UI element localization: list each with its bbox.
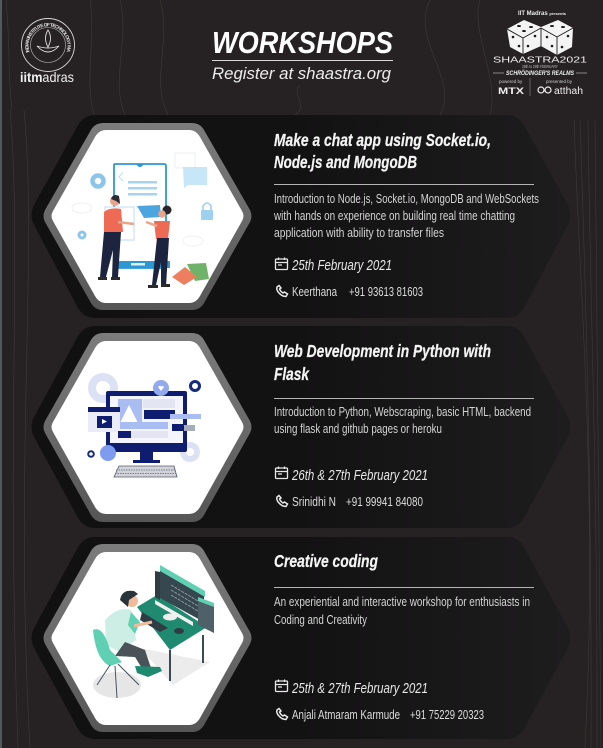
workshop title bbox=[274, 130, 491, 172]
panel background bbox=[32, 326, 570, 528]
panel background bbox=[32, 115, 570, 318]
logo: IIT Madras: iitmadras bbox=[20, 69, 74, 85]
date: 26th & 27th February 2021 bbox=[291, 467, 428, 484]
logo: Shaastra 2021: presented by bbox=[546, 79, 573, 84]
logo: Shaastra 2021: MTX bbox=[498, 86, 524, 96]
contact bbox=[292, 284, 423, 299]
hexagon frame bbox=[44, 544, 252, 732]
icon: calendar bbox=[276, 466, 288, 478]
date: 25th & 27th February 2021 bbox=[291, 680, 428, 697]
contact: Srinidhi N bbox=[292, 494, 336, 509]
icon: calendar bbox=[276, 680, 288, 692]
description: application with ability to transfer files bbox=[274, 226, 444, 240]
logo: Shaastra 2021: 25th to 28th FEBRUARY bbox=[522, 64, 558, 69]
contact: Anjali Atmaram Karmude bbox=[292, 707, 400, 722]
logo: Shaastra 2021: SCHRÖDINGER'S REALMS bbox=[506, 68, 575, 77]
icon: dice bbox=[507, 20, 573, 55]
contact: +91 93613 81603 bbox=[349, 284, 423, 299]
description: with hands on experience on building real time chatting bbox=[273, 209, 515, 223]
hexagon picture background bbox=[52, 130, 244, 303]
description bbox=[274, 595, 530, 627]
contact: +91 99941 84080 bbox=[346, 494, 423, 509]
illustration: person coding at desk bbox=[93, 565, 214, 698]
panel: web development workshop bbox=[32, 326, 570, 528]
logo: Shaastra 2021: IIT Madras presents bbox=[518, 11, 567, 17]
hexagon frame bbox=[44, 123, 252, 310]
hexagon picture background bbox=[52, 341, 244, 514]
description bbox=[273, 192, 539, 240]
illustration: people with phone screen bbox=[72, 153, 213, 288]
description: Coding and Creativity bbox=[274, 613, 368, 627]
workshop title bbox=[274, 341, 491, 384]
logo: IIT Madras bbox=[20, 18, 75, 85]
panel: chat app workshop bbox=[32, 115, 570, 318]
hexagon frame bbox=[44, 333, 252, 522]
workshop title: Make a chat app using Socket.io, bbox=[274, 130, 491, 150]
description: An experiential and interactive workshop for enthusiasts in bbox=[274, 595, 530, 609]
panel background bbox=[32, 537, 570, 739]
contact: +91 75229 20323 bbox=[410, 707, 484, 722]
date: 25th February 2021 bbox=[291, 257, 392, 274]
icon: phone bbox=[277, 496, 288, 506]
contact: Keerthana bbox=[292, 284, 338, 299]
logo: Shaastra 2021: atthah bbox=[554, 86, 583, 97]
workshop title: Node.js and MongoDB bbox=[274, 152, 417, 172]
subheading: register: Register at shaastra.org bbox=[212, 64, 392, 83]
description: using flask and github pages or heroku bbox=[274, 422, 442, 436]
logo: Shaastra 2021: SHAASTRA2021 bbox=[493, 54, 587, 64]
logo: Shaastra 2021 bbox=[493, 11, 587, 97]
icon: calendar bbox=[276, 258, 288, 270]
icon: phone bbox=[277, 708, 288, 720]
workshop title: Creative coding bbox=[274, 551, 378, 571]
workshop title: Flask bbox=[274, 364, 310, 384]
logo: Shaastra 2021: powered by bbox=[499, 79, 523, 84]
illustration: computer monitor bbox=[88, 377, 201, 477]
description: Introduction to Python, Webscraping, basic HTML, backend bbox=[274, 405, 531, 419]
hexagon picture background bbox=[52, 552, 244, 725]
icon: phone bbox=[277, 286, 288, 296]
heading: workshops: WORKSHOPS bbox=[212, 25, 393, 60]
panel: creative coding workshop bbox=[32, 537, 570, 739]
contact bbox=[292, 494, 423, 509]
workshop title: Web Development in Python with bbox=[274, 341, 491, 361]
description bbox=[274, 405, 531, 436]
